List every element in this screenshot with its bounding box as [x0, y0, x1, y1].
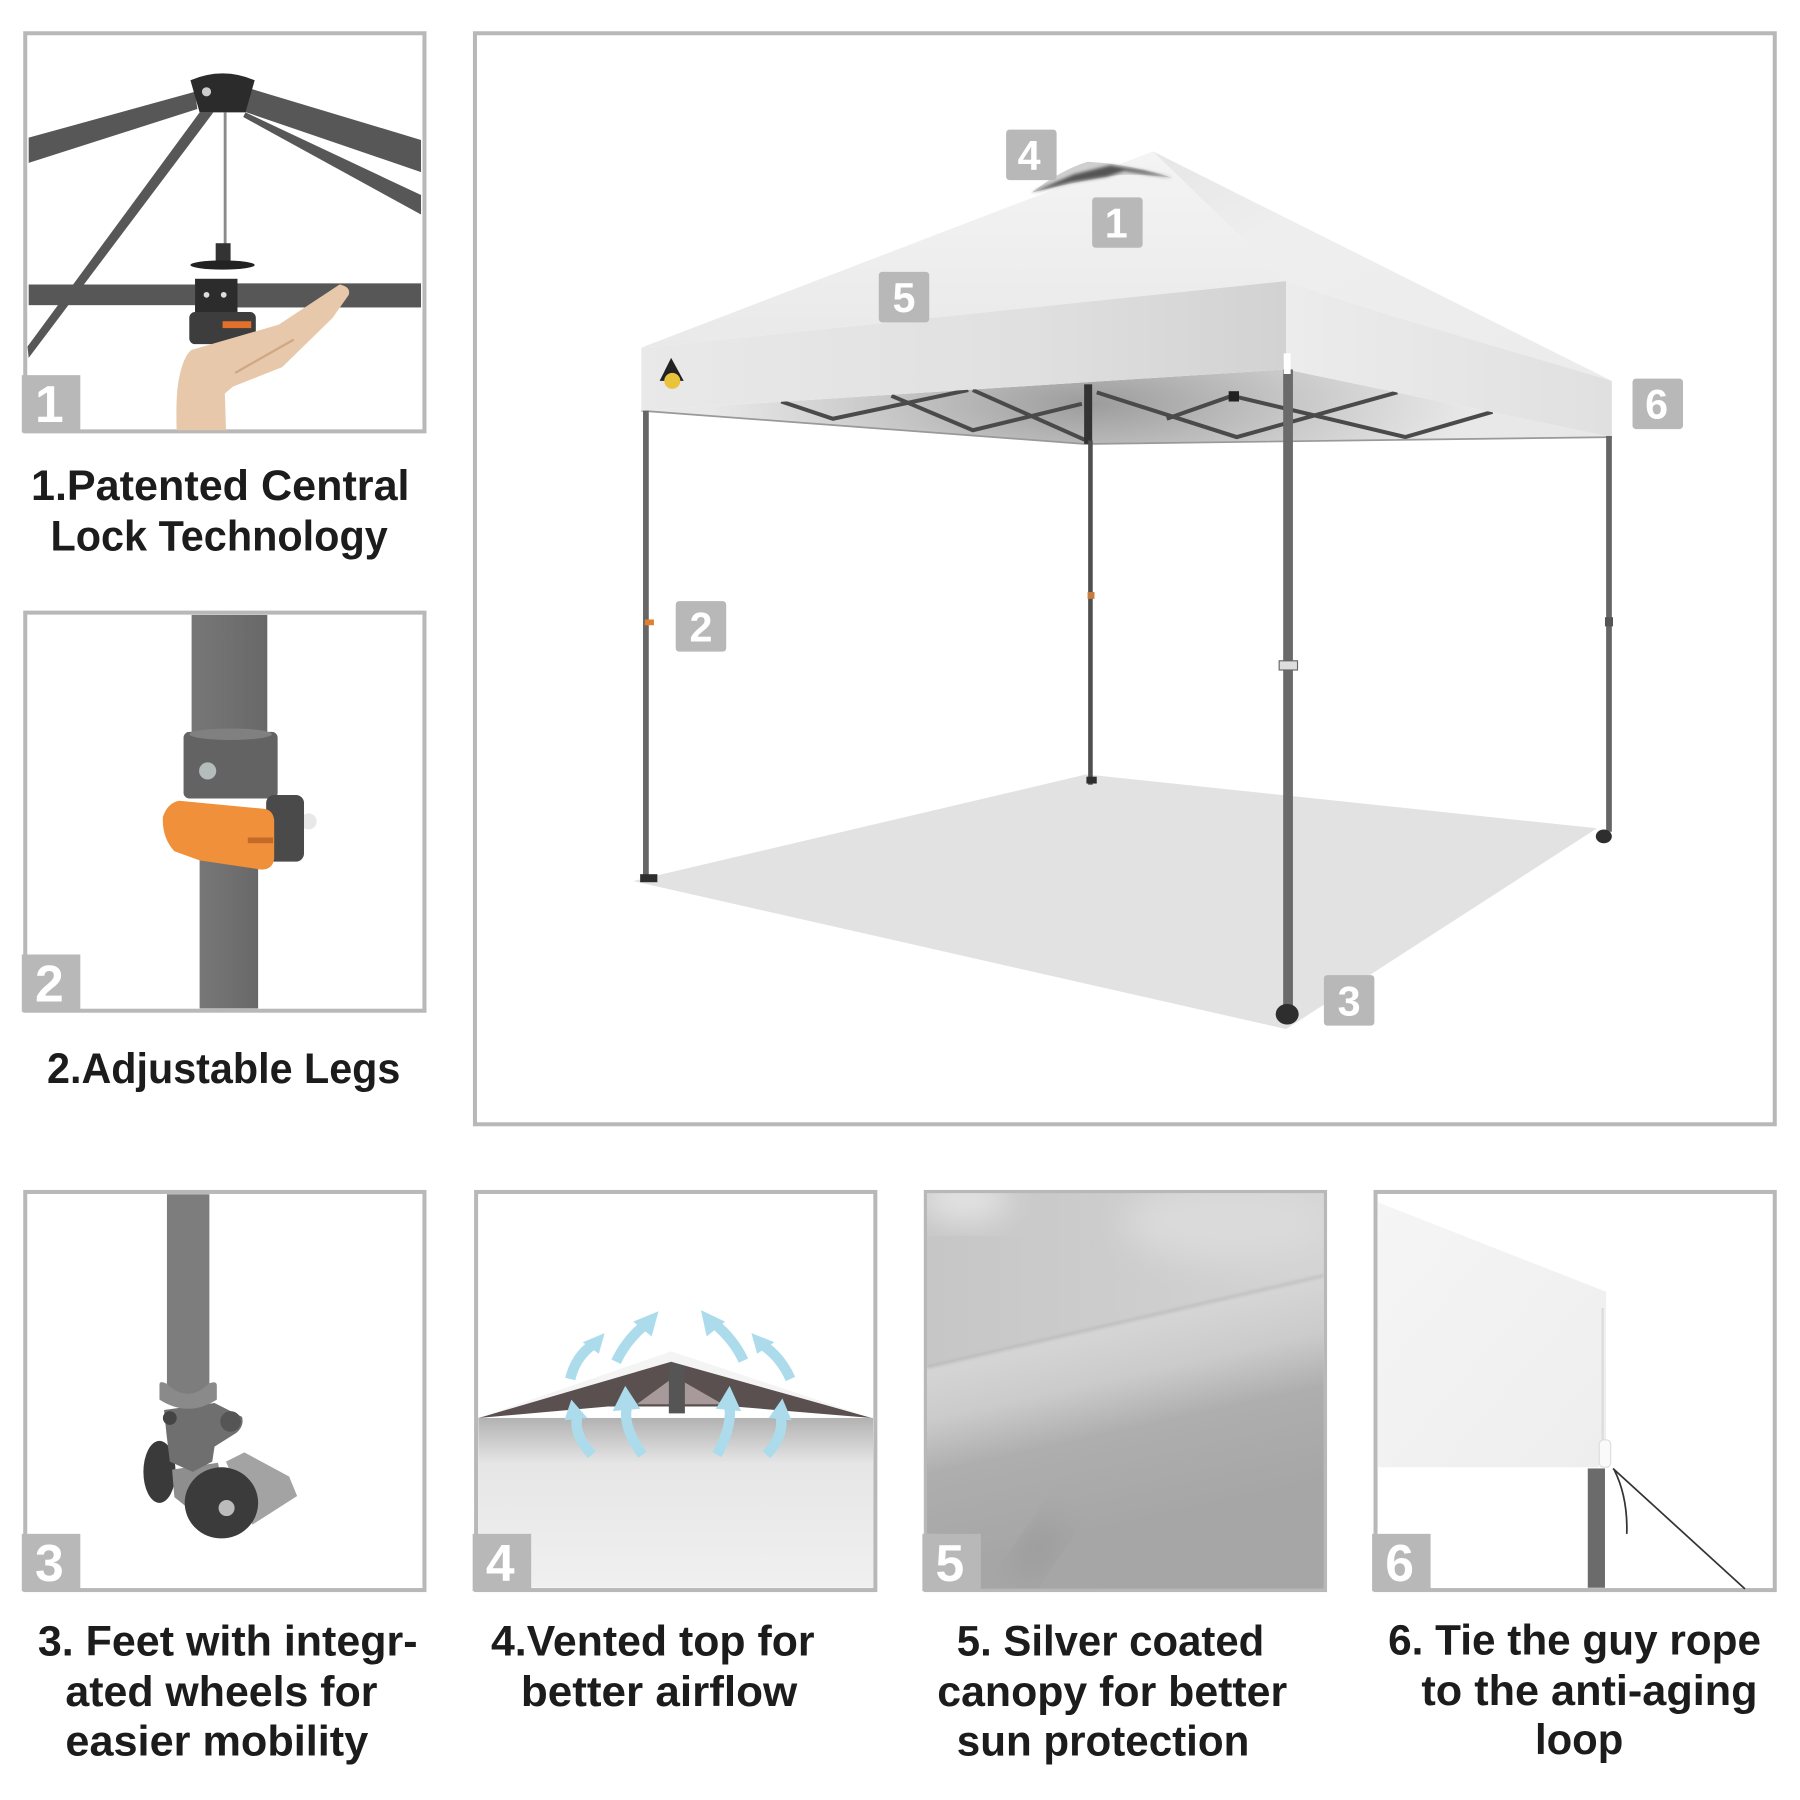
- pole: [1588, 1468, 1605, 1588]
- vent opening: [478, 1361, 872, 1418]
- valance right: [1286, 281, 1612, 437]
- panel 1: central lock: [22, 33, 424, 433]
- panel 5: silver coated canopy: [918, 1176, 1331, 1592]
- truss: [641, 384, 1612, 444]
- caption 4: [491, 1617, 815, 1715]
- badge 3: [1324, 975, 1374, 1026]
- white seam: [1284, 353, 1291, 374]
- badge 1: 1: [35, 375, 64, 433]
- caption 1: Lock Technology: [50, 513, 388, 560]
- caption 4: 4.Vented top for: [491, 1617, 815, 1664]
- feet: [640, 777, 1612, 1024]
- vent cap: [478, 1351, 872, 1418]
- badge 5: [879, 272, 929, 322]
- fabric: [918, 1176, 1331, 1589]
- caption 4: better airflow: [521, 1668, 798, 1715]
- caption 5: [937, 1617, 1287, 1764]
- hand: [176, 285, 349, 430]
- badge 3: [22, 1534, 80, 1592]
- badge 5: 5: [936, 1534, 964, 1592]
- caption 3: [38, 1617, 418, 1764]
- caption 3: easier mobility: [65, 1717, 369, 1764]
- badge 2: 2: [35, 955, 64, 1013]
- collar: [184, 728, 278, 798]
- caption 5: sun protection: [957, 1717, 1249, 1764]
- leg clips: [645, 592, 1613, 670]
- badge 2: [676, 601, 726, 652]
- badge 4: 4: [486, 1534, 515, 1592]
- clamp: [163, 795, 317, 870]
- foot plate: [226, 1452, 297, 1525]
- legs: [643, 369, 1612, 1018]
- airflow arrows: [564, 1310, 792, 1455]
- guy rope: [1613, 1468, 1745, 1589]
- leg tube: [192, 615, 267, 1008]
- frame struts: [28, 84, 421, 358]
- canopy corner: [1378, 1202, 1606, 1467]
- caption 3: 3. Feet with integr-: [38, 1617, 418, 1664]
- badge 5: 5: [893, 275, 915, 321]
- main panel: tent: [475, 33, 1775, 1124]
- lower hub: [189, 243, 256, 344]
- ground shadow: [633, 774, 1597, 1029]
- badge 2: 2: [689, 604, 712, 650]
- badge 5: [922, 1534, 981, 1592]
- caption 3: ated wheels for: [65, 1668, 377, 1715]
- vent post: [669, 1361, 685, 1413]
- caption 6: [1388, 1616, 1761, 1763]
- canopy roof left: [641, 151, 1286, 348]
- badge 6: [1633, 379, 1683, 429]
- back wheel: [143, 1441, 176, 1503]
- badge 2: [22, 954, 80, 1013]
- canopy roof right: [1153, 151, 1612, 381]
- caption 5: canopy for better: [937, 1668, 1287, 1715]
- valance left: [641, 281, 1286, 411]
- canopy surface: [478, 1418, 873, 1588]
- badge 6: 6: [1645, 382, 1668, 428]
- caption 2: 2.Adjustable Legs: [47, 1045, 400, 1092]
- upper hub: [190, 73, 255, 112]
- pole: [167, 1194, 209, 1398]
- vent: [1031, 162, 1172, 193]
- caption 5: 5. Silver coated: [957, 1617, 1264, 1664]
- connector: [159, 1382, 243, 1472]
- badge 6: [1372, 1534, 1431, 1592]
- front wheel: [185, 1467, 258, 1538]
- badge 4: [473, 1534, 531, 1592]
- panel 3: wheeled feet: [22, 1192, 424, 1592]
- caption 1: [31, 462, 410, 560]
- badge 3: 3: [35, 1534, 64, 1592]
- vent light: [637, 1377, 723, 1404]
- badge 4: 4: [1018, 133, 1041, 179]
- lift wire: [224, 112, 227, 244]
- panel 6: guy rope: [1372, 1192, 1775, 1592]
- badge 1: [1092, 197, 1143, 248]
- badge 1: [22, 375, 80, 433]
- panel 4: vented top: [473, 1192, 875, 1592]
- seam: [1602, 1308, 1604, 1446]
- caption 1: 1.Patented Central: [31, 462, 410, 509]
- caption 6: to the anti-aging: [1421, 1667, 1758, 1714]
- caption 6: loop: [1535, 1716, 1623, 1763]
- badge 1: 1: [1105, 200, 1128, 246]
- canopy underside: [641, 369, 1612, 444]
- panel 2: adjustable legs: [22, 613, 424, 1013]
- axle: [172, 1463, 224, 1512]
- badge 3: 3: [1338, 978, 1361, 1024]
- logo: [660, 358, 684, 389]
- badge 4: [1006, 130, 1057, 180]
- anti-aging loop: [1599, 1440, 1611, 1467]
- caption 6: 6. Tie the guy rope: [1388, 1616, 1761, 1663]
- badge 6: 6: [1385, 1534, 1414, 1592]
